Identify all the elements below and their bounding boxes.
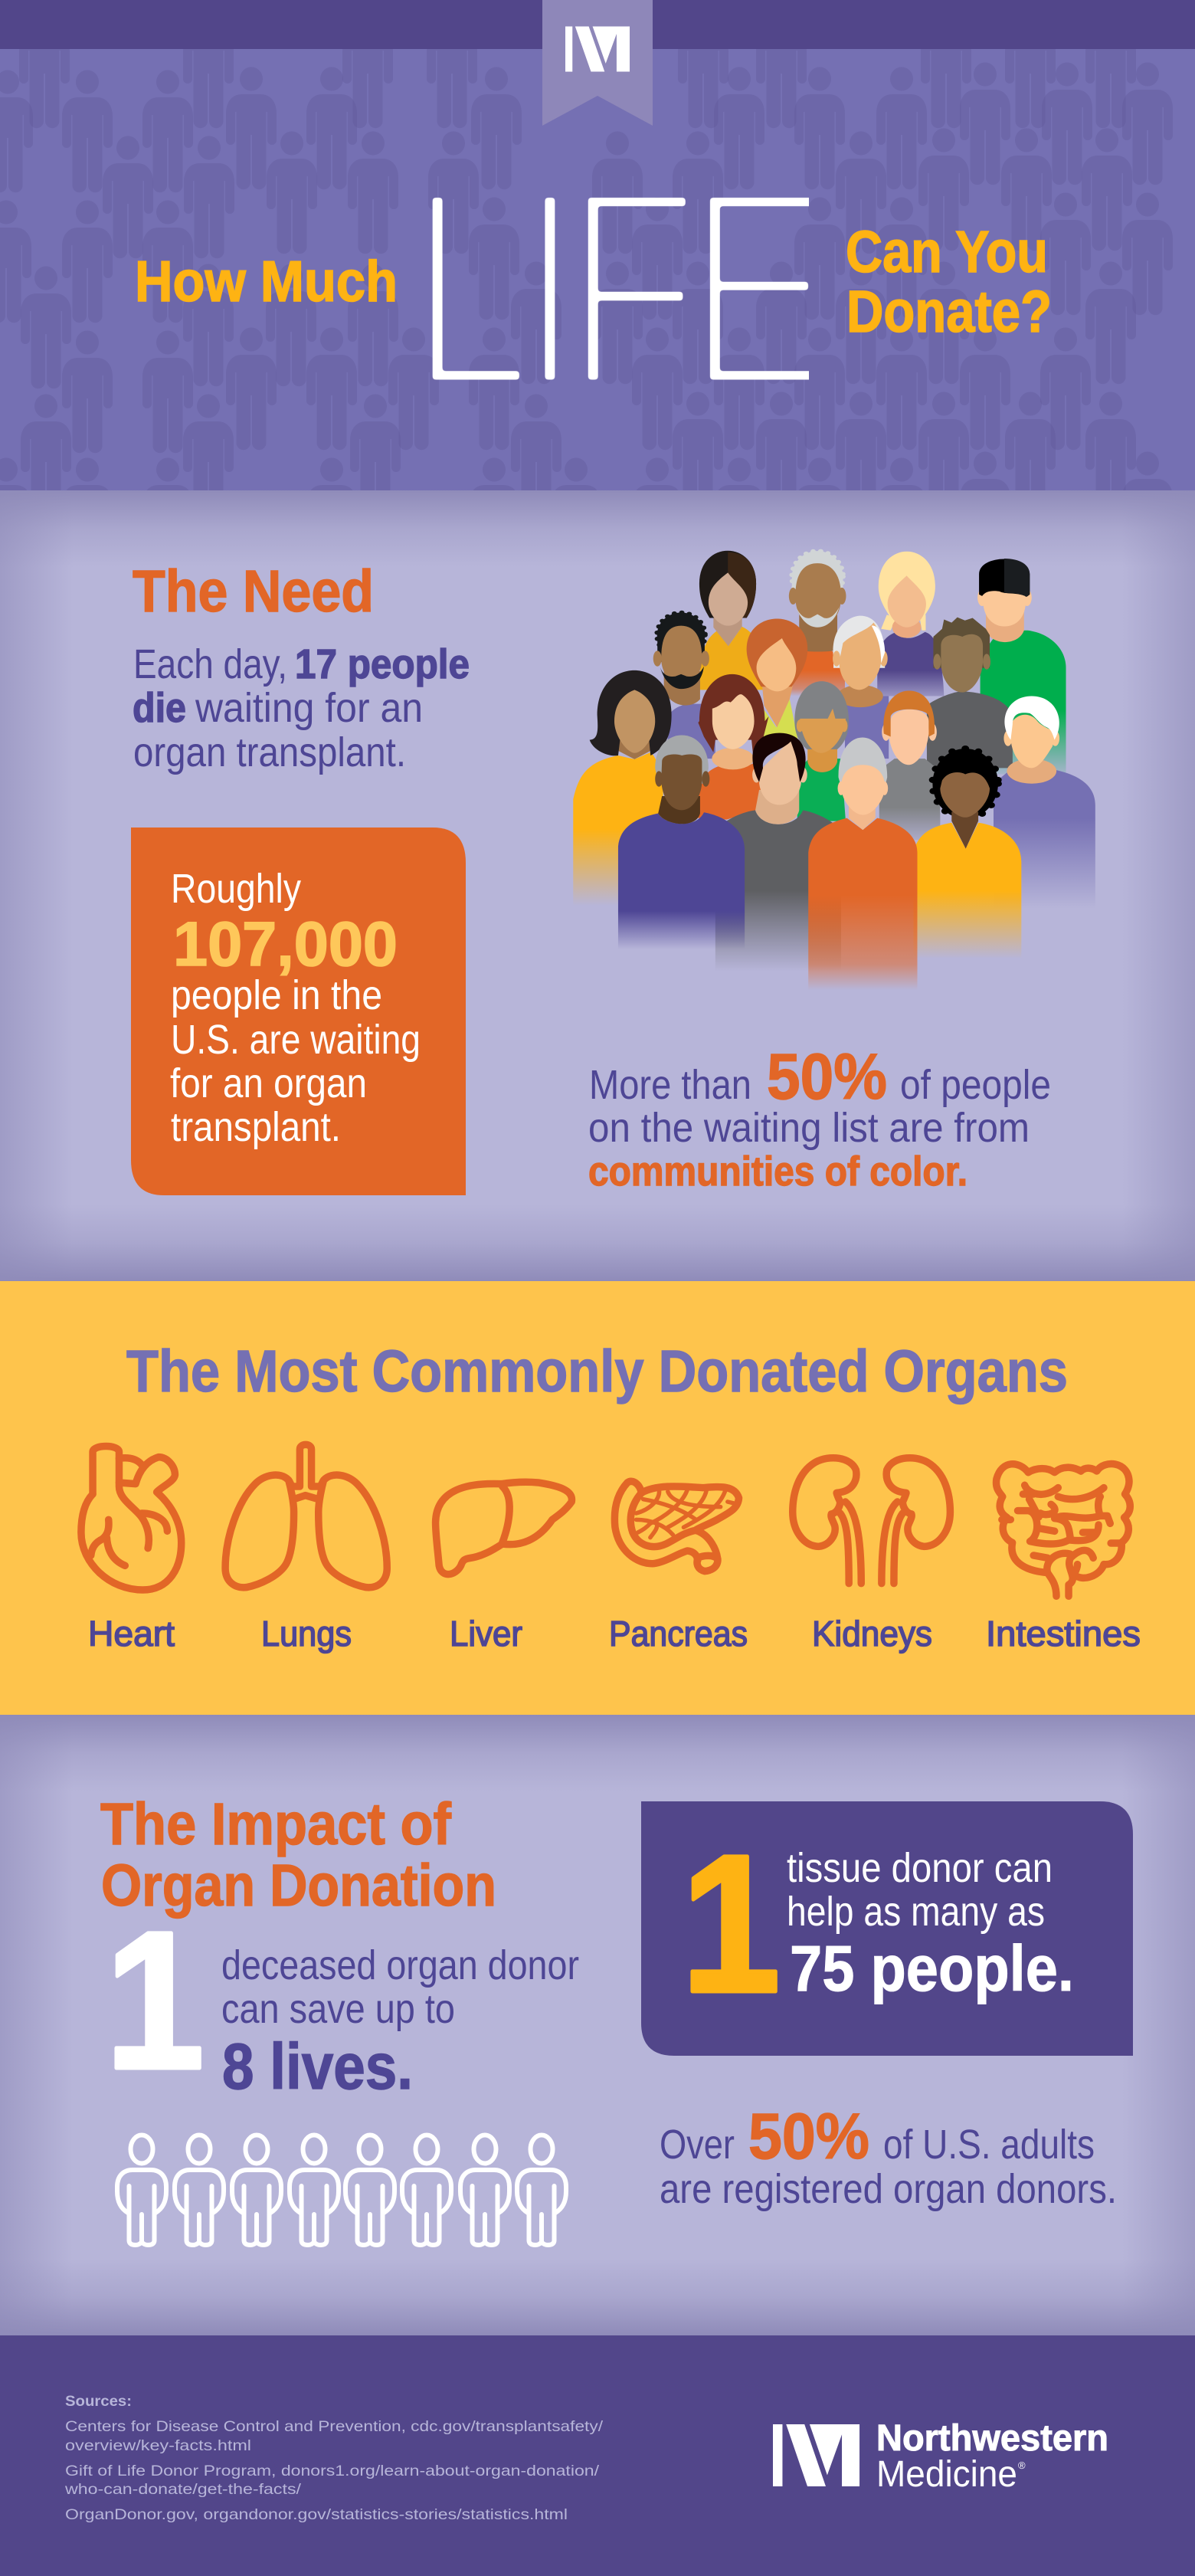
text: 17 people die (133, 641, 470, 775)
title: Can You (846, 219, 1048, 285)
illustration: diverse crowd of people (573, 551, 1095, 990)
heading: Organ Donation (101, 1853, 496, 1919)
organ labels: Liver (450, 1614, 522, 1653)
person 7 (833, 616, 889, 759)
callout: 107,000 people waiting: people in the (171, 972, 382, 1018)
title: Donate? (846, 279, 1052, 345)
heading (100, 1791, 496, 1919)
background pattern of people (0, 6, 1173, 580)
big number 1: 1 (105, 1891, 205, 2110)
icon: pancreas (614, 1481, 739, 1571)
callout: tissue donor: tissue donor can (787, 1845, 1053, 1891)
text: over 50% registered: are registered organ donors. (660, 2166, 1117, 2212)
text: more than 50%: of people (900, 1062, 1051, 1108)
footer panel (0, 2335, 1195, 2576)
callout: tissue donor: help as many as (787, 1889, 1045, 1935)
callout: tissue donor: 75 people. (790, 1932, 1074, 2004)
text: 17 people die: organ transplant. (133, 729, 406, 775)
icon: kidneys (793, 1458, 950, 1584)
person 9 (573, 670, 672, 906)
person 17 (914, 749, 1021, 959)
icon: heart (81, 1446, 182, 1590)
organ icons: pancreas, kidneys, intestines (614, 1458, 1130, 1596)
organ labels: Heart (88, 1614, 175, 1653)
callout: 107,000 people waiting: for an organ (170, 1060, 367, 1106)
title (138, 198, 1049, 380)
organ icons: heart, lungs, liver (81, 1444, 571, 1590)
sources: who-can-donate/get-the-facts/ (64, 2481, 302, 2498)
sources (64, 2393, 604, 2523)
organ labels: Intestines (986, 1614, 1141, 1653)
Northwestern Medicine logo: Northwestern (876, 2418, 1108, 2459)
person 2 (789, 551, 846, 696)
text: 17 people die: die (133, 685, 186, 731)
text: more than 50%: communities of color. (588, 1149, 967, 1195)
person 8 (927, 618, 1013, 768)
icon row: eight people (117, 2135, 566, 2245)
text: 8 lives (221, 1942, 579, 2102)
top band (0, 0, 1195, 49)
text: more than 50%: on the waiting list are from (588, 1105, 1030, 1151)
text: 17 people die: Each day, (133, 641, 287, 687)
organ labels: Kidneys (812, 1614, 932, 1653)
icon: lungs (225, 1444, 387, 1588)
sources: overview/key-facts.html (65, 2437, 251, 2454)
icon: liver (436, 1482, 571, 1575)
callout: 107,000 people waiting: U.S. are waiting (171, 1017, 421, 1063)
person 16 (808, 738, 918, 990)
text: 8 lives: 8 lives. (222, 2030, 413, 2102)
person 11 (794, 681, 849, 821)
organ labels (88, 1614, 1141, 1653)
person 15 (715, 733, 841, 972)
panel: most commonly donated organs (0, 1281, 1195, 1715)
text: over 50% registered (660, 2100, 1117, 2212)
text: more than 50%: More than (589, 1062, 751, 1108)
text: over 50% registered: of U.S. adults (883, 2122, 1095, 2168)
panel: impact of organ donation (0, 1715, 1195, 2335)
Northwestern Medicine logo: Medicine (876, 2454, 1017, 2495)
person 3 (877, 552, 944, 696)
person 12 (879, 691, 940, 840)
text: more than 50% (588, 1041, 1051, 1195)
organ labels: Lungs (261, 1614, 352, 1653)
callout: 107,000 people waiting (131, 828, 466, 1195)
sources: Gift of Life Donor Program, donors1.org/learn-about-organ-donation/ (65, 2463, 600, 2479)
person 6 (747, 619, 807, 746)
Northwestern Medicine logo (773, 2418, 1108, 2495)
icon: intestines (997, 1464, 1130, 1596)
organ labels: Pancreas (609, 1614, 748, 1653)
heading: The Most Commonly Donated Organs (126, 1339, 1068, 1404)
ribbon with NM logo mark (542, 0, 653, 126)
callout: tissue donor (641, 1801, 1133, 2056)
person 14 (618, 735, 745, 949)
title: How Much (135, 249, 398, 313)
person 13 (994, 696, 1095, 909)
text: 17 people die: waiting for an (195, 685, 423, 731)
callout: 107,000 people waiting: Roughly (171, 866, 301, 912)
big number 1: 1 (681, 1814, 781, 2034)
title word: LIFE: LIFE (409, 131, 834, 447)
text: over 50% registered: Over (660, 2122, 735, 2168)
callout: 107,000 people waiting: 107,000 (173, 909, 398, 979)
text: 8 lives: can save up to (221, 1986, 455, 2032)
text: more than 50%: 50% (767, 1041, 887, 1113)
callout: 107,000 people waiting: transplant. (171, 1104, 341, 1150)
heading: The Need: The Need (133, 559, 374, 624)
text: 17 people die: 17 people (295, 641, 470, 687)
Northwestern Medicine logo: ® (1018, 2460, 1026, 2471)
sources: Sources: (65, 2393, 132, 2410)
person 5 (653, 613, 715, 759)
hero header panel (0, 49, 1195, 490)
sources: Centers for Disease Control and Prevention, cdc.gov/transplantsafety/ (65, 2418, 604, 2435)
text: 8 lives: deceased organ donor (221, 1942, 579, 1988)
panel: the need (0, 490, 1195, 1281)
person 10 (698, 674, 768, 820)
heading: The Impact of (100, 1791, 451, 1857)
text: over 50% registered: 50% (748, 2100, 869, 2172)
person 4 (977, 559, 1066, 774)
sources: OrganDonor.gov, organdonor.gov/statistics-stories/statistics.html (65, 2506, 568, 2523)
person 1 (699, 551, 767, 690)
